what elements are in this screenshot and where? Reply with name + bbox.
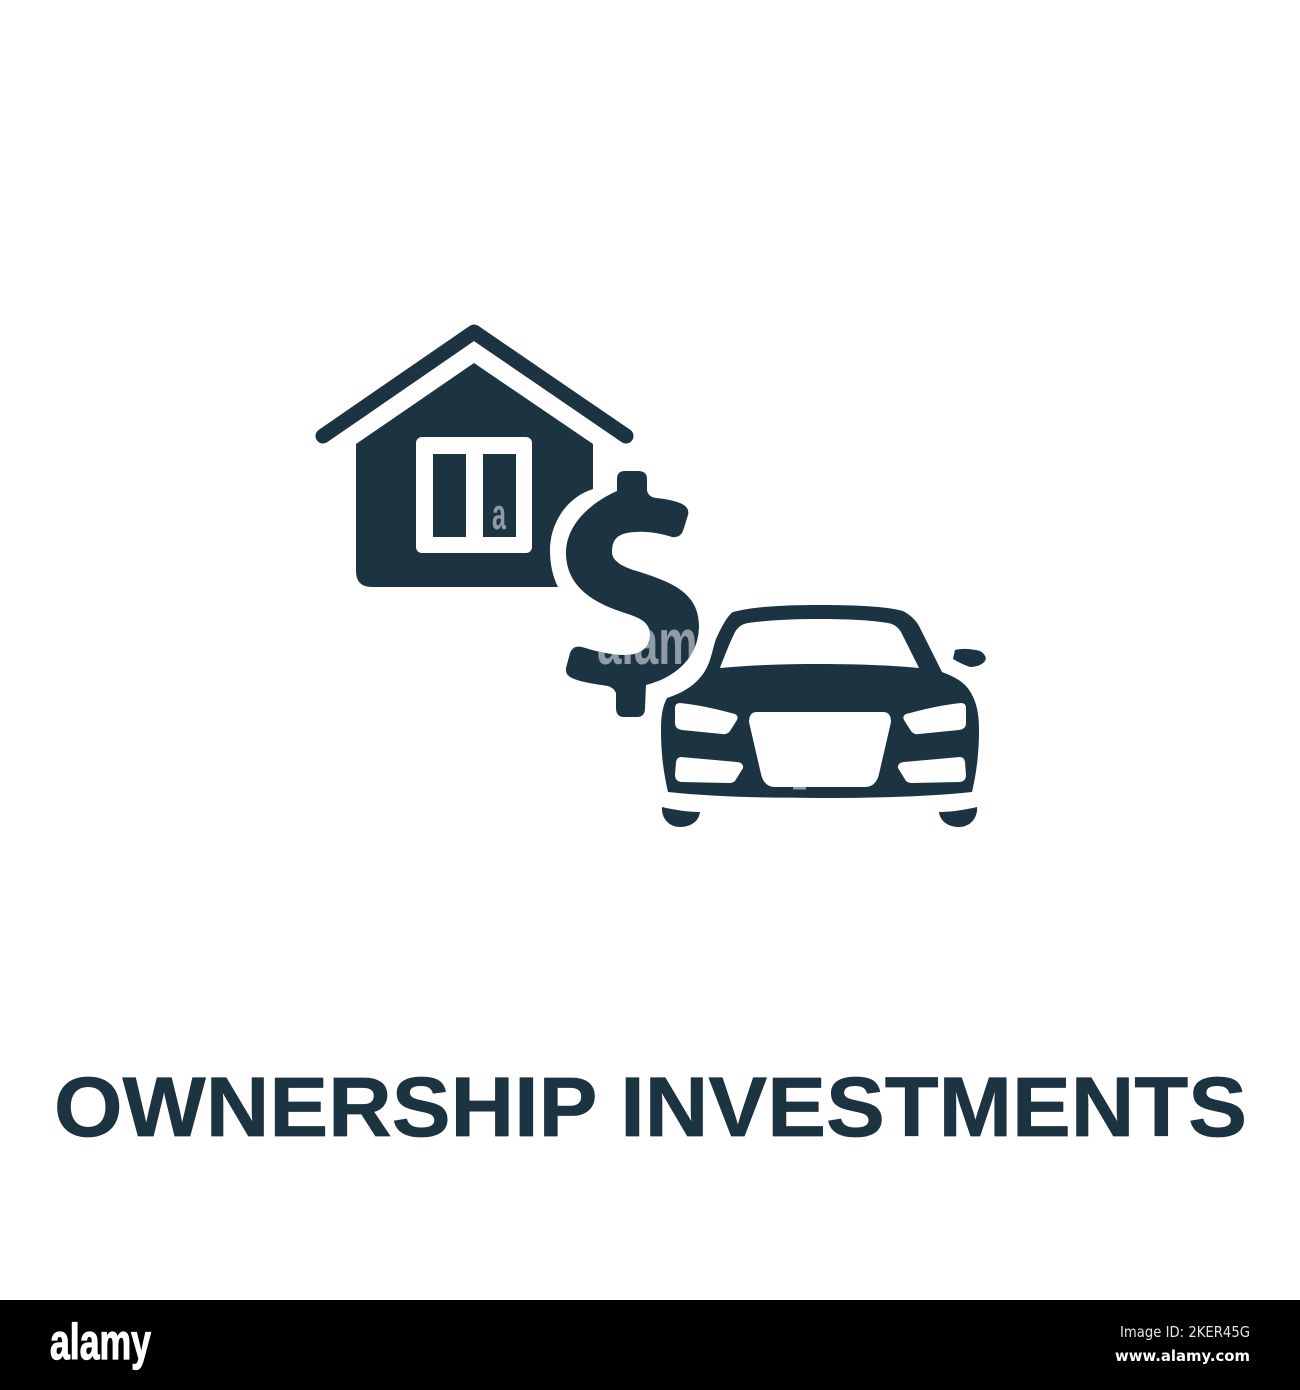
watermark fragment under grille bbox=[793, 787, 806, 790]
car side mirror bbox=[953, 649, 986, 667]
icon: house bbox=[323, 332, 626, 587]
car left lower light bbox=[675, 757, 743, 783]
house roof bbox=[323, 332, 626, 436]
car right wheel bbox=[939, 807, 977, 827]
car right headlight bbox=[903, 703, 966, 734]
car grille bbox=[749, 712, 891, 787]
car left wheel bbox=[662, 807, 700, 827]
title: OWNERSHIP INVESTMENTS bbox=[54, 1060, 1247, 1154]
icon: car bbox=[661, 605, 986, 827]
watermark clipped by dollar sign: alamy bbox=[597, 606, 722, 678]
house body bbox=[356, 363, 593, 587]
alamy logo: alamy bbox=[50, 1314, 151, 1370]
image id: Image ID: 2KER45G bbox=[1120, 1323, 1250, 1341]
house window bbox=[416, 437, 532, 553]
watermark letter in window: a bbox=[492, 490, 506, 539]
car left headlight bbox=[675, 703, 738, 734]
website: www.alamy.com bbox=[1115, 1347, 1250, 1365]
footer bar bbox=[0, 1300, 1300, 1390]
car body bbox=[661, 605, 979, 798]
car right lower light bbox=[898, 757, 966, 783]
icon: dollar sign bbox=[566, 471, 699, 717]
